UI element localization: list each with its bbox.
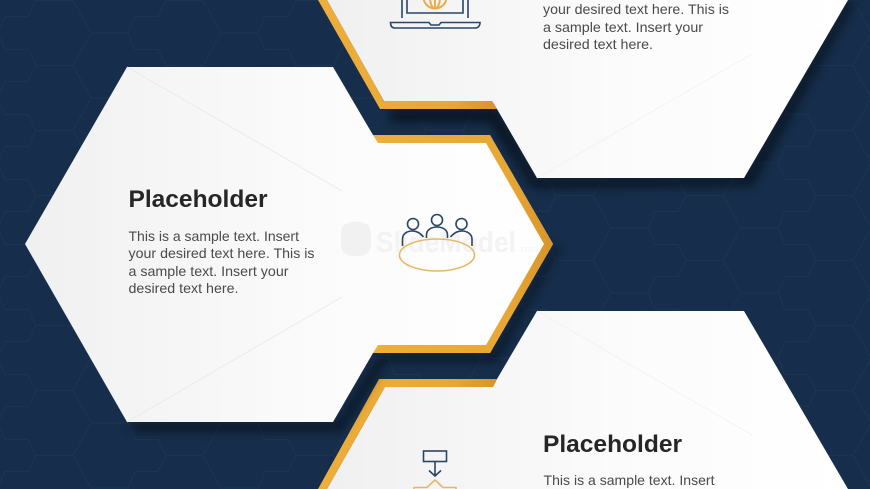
shadow: left hexagon xyxy=(127,244,560,431)
text: left body: a sample text. Insert your xyxy=(128,263,289,279)
top hexagon fold line xyxy=(537,54,752,178)
text: left body: desired text here. xyxy=(128,280,238,296)
heading: bottom placeholder: Placeholder xyxy=(543,431,682,458)
panel: left hexagon xyxy=(25,67,553,422)
left hexagon fold line upper xyxy=(127,67,342,191)
bottom hexagon fold line xyxy=(537,311,752,435)
icon: laptop with globe xyxy=(390,0,480,28)
top hexagon orange band xyxy=(318,0,497,109)
text: top body: desired text here. xyxy=(543,36,653,52)
text: left body: This is a sample text. Insert xyxy=(128,228,299,244)
left hexagon orange band xyxy=(373,135,553,353)
panel: bottom right hexagon xyxy=(318,311,848,489)
watermark: .com xyxy=(518,244,538,254)
watermark: SlideModel xyxy=(376,227,516,259)
text: bottom body: This is a sample text. Insert xyxy=(544,472,715,488)
shadow: top hexagon xyxy=(390,0,856,188)
text: top body: your desired text here. This is xyxy=(543,1,729,17)
top hexagon body xyxy=(327,0,848,178)
heading: left placeholder: Placeholder xyxy=(128,186,268,213)
bottom hexagon orange band xyxy=(318,379,497,489)
text: top body xyxy=(543,1,729,52)
watermark xyxy=(341,222,538,259)
panel: top right hexagon xyxy=(318,0,848,178)
bottom hexagon body xyxy=(327,311,848,489)
text: top body: a sample text. Insert your xyxy=(543,19,703,35)
left hexagon fold line lower xyxy=(127,297,342,422)
icon: flowchart xyxy=(414,451,456,489)
icon: people around a table xyxy=(400,214,474,271)
text: left body xyxy=(128,228,314,296)
text: left body: your desired text here. This is xyxy=(128,245,314,261)
left hexagon body xyxy=(25,67,553,422)
